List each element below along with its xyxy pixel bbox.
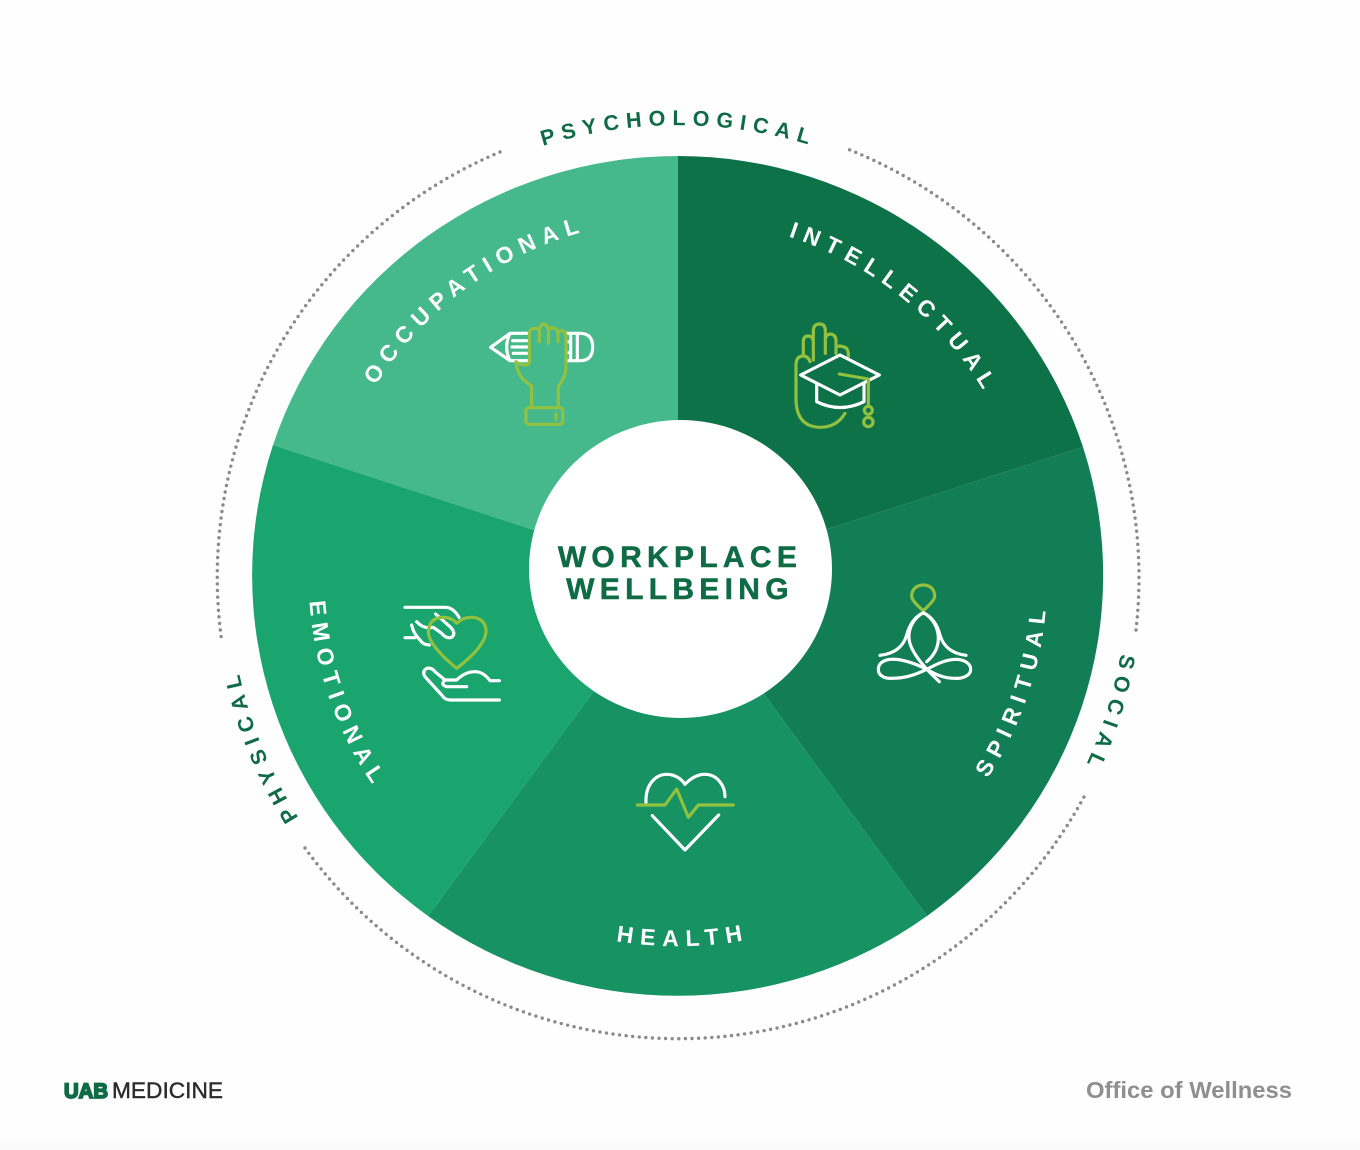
heading: workplace wellbeing	[558, 541, 802, 606]
logo: UAB Medicine: UAB	[64, 1080, 108, 1103]
panel: health segment	[428, 577, 927, 996]
center circle	[529, 420, 832, 718]
icon: heart with pulse	[637, 774, 733, 850]
segment label: occupational: OCCUPATIONAL	[366, 220, 580, 382]
icon: hands with heart	[405, 607, 499, 700]
ring label: social: SOCIAL	[1087, 655, 1134, 764]
heading: workplace wellbeing: WORKPLACE	[558, 541, 802, 574]
footer text: office of wellness: Office of Wellness	[1086, 1077, 1292, 1103]
icon: meditating figure	[878, 585, 971, 682]
dotted ring	[217, 148, 1139, 1039]
panel: occupational segment	[273, 156, 678, 577]
segment label: health: HEALTH	[618, 925, 742, 946]
heading: workplace wellbeing: WELLBEING	[566, 573, 794, 606]
segment label: emotional: EMOTIONAL	[310, 601, 380, 784]
ring label: psychological: PSYCHOLOGICAL	[540, 110, 808, 146]
segment label: intellectual: INTELLECTUAL	[790, 222, 992, 390]
logo: UAB Medicine	[64, 1078, 223, 1103]
panel: spiritual segment	[678, 447, 1103, 916]
logo: UAB Medicine: MEDICINE	[112, 1078, 223, 1103]
panel: emotional segment	[252, 445, 678, 916]
icon: hand with graduation cap	[796, 324, 879, 427]
panel: intellectual segment	[678, 156, 1083, 577]
icon: hand holding pencil	[491, 324, 593, 424]
ring label: physical: PHYSICAL	[226, 674, 298, 824]
segment label: spiritual: SPIRITUAL	[976, 611, 1046, 776]
